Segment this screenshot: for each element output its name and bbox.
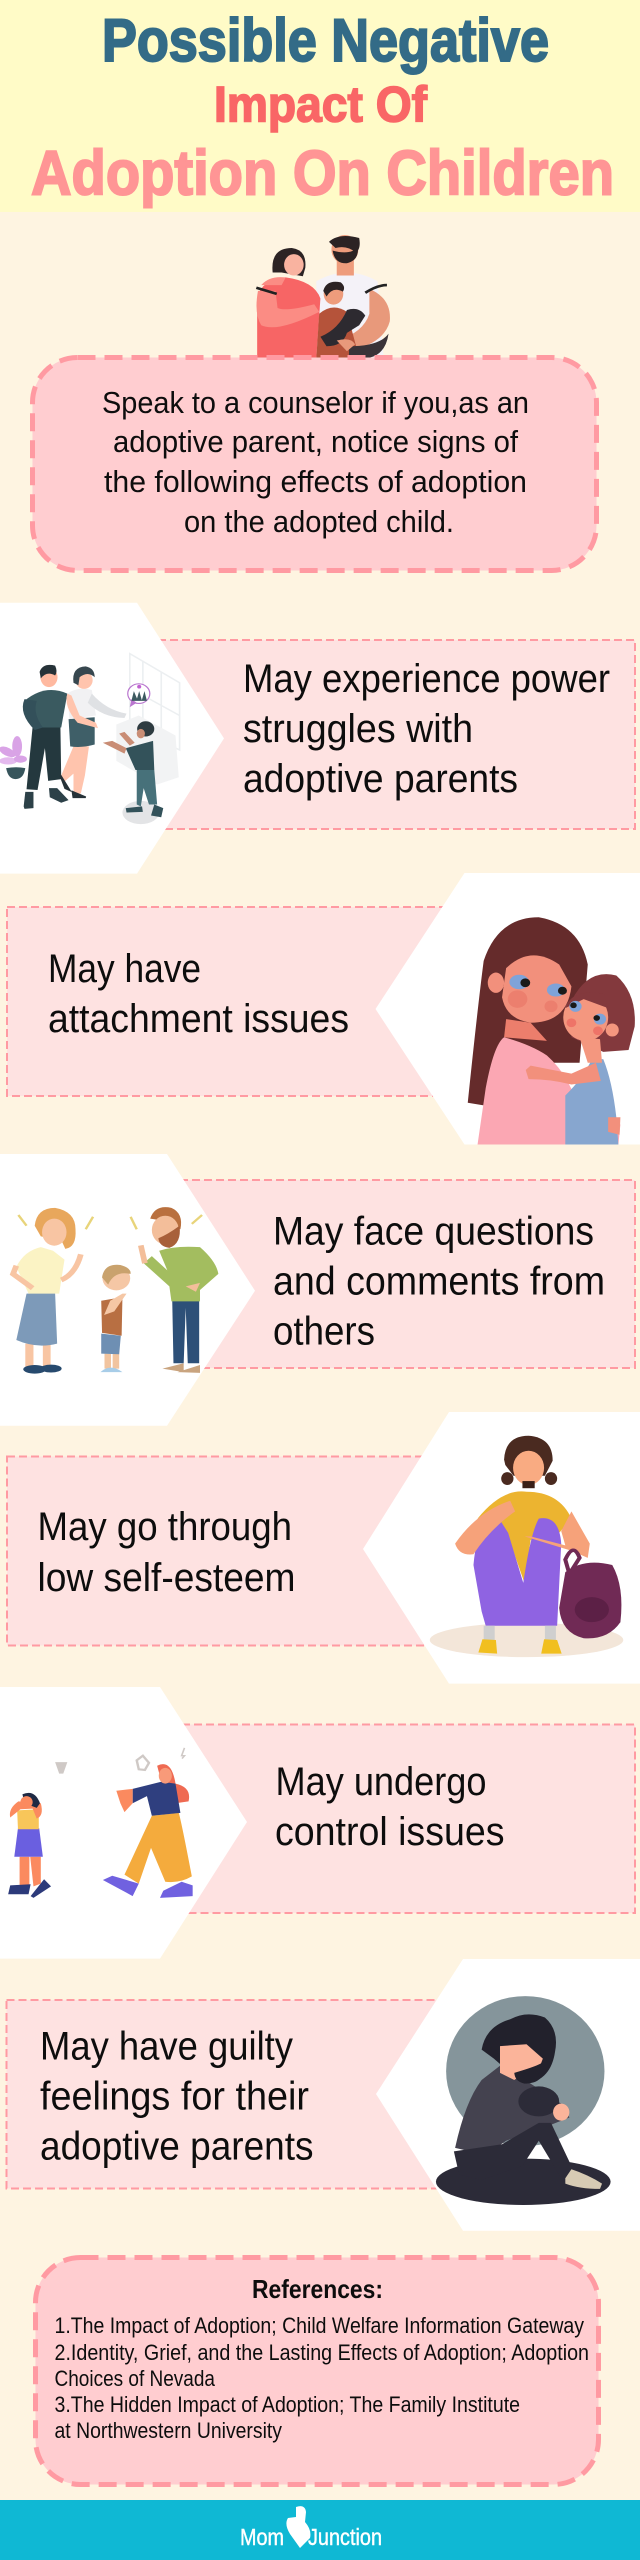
text: questions and comments: May face questions xyxy=(273,1210,594,1254)
text: low self-esteem xyxy=(38,1505,296,1600)
panel: questions and comments xyxy=(0,1154,635,1426)
text: control issues: May undergo xyxy=(276,1760,486,1804)
callout: counselor note: on the adopted child. xyxy=(184,504,454,539)
text: control issues xyxy=(275,1760,504,1854)
panel: control issues xyxy=(0,1687,635,1959)
title line 2: Impact Of xyxy=(214,76,427,132)
text: guilty feelings xyxy=(40,2024,314,2168)
header: title band xyxy=(0,0,640,212)
text: questions and comments xyxy=(273,1210,605,1354)
references list: 3.The Hidden Impact of Adoption; The Family Institute xyxy=(54,2392,520,2417)
references list: 2.Identity, Grief, and the Lasting Effects of Adoption; Adoption xyxy=(54,2340,589,2365)
text: power struggles: struggles with xyxy=(243,707,473,751)
text: low self-esteem: low self-esteem xyxy=(38,1556,296,1600)
callout: counselor note: adoptive parent, notice signs of xyxy=(113,424,518,459)
callout: counselor note: the following effects of adoption xyxy=(104,464,527,499)
panel: references xyxy=(36,2258,598,2484)
panel: power struggles xyxy=(0,603,635,874)
panel: attachment issues xyxy=(7,873,640,1145)
icon: arguing parents and child xyxy=(13,1207,218,1374)
callout: counselor note xyxy=(32,358,596,570)
icon: sad woman hugging knees xyxy=(436,1996,611,2205)
text: attachment issues xyxy=(48,947,349,1041)
references list: at Northwestern University xyxy=(54,2418,282,2443)
references heading: References: xyxy=(252,2274,383,2304)
text: questions and comments: others xyxy=(273,1310,375,1354)
text: power struggles: May experience power xyxy=(243,657,610,701)
icon: family illustration xyxy=(256,235,390,358)
icon: woman walking away from crying girl xyxy=(8,1748,193,1898)
text: guilty feelings: adoptive parents xyxy=(40,2124,314,2168)
text: control issues: control issues xyxy=(275,1810,504,1854)
references list: Choices of Nevada xyxy=(54,2366,216,2391)
icon: mother hugging daughter xyxy=(468,917,635,1145)
text: low self-esteem: May go through xyxy=(38,1505,292,1549)
text: power struggles xyxy=(243,657,610,801)
icon: parents and child xyxy=(0,654,180,824)
title line 1: Possible Negative xyxy=(102,7,549,74)
text: attachment issues: May have xyxy=(48,947,201,991)
callout: counselor note: Speak to a counselor if you,as an xyxy=(102,385,529,420)
text: attachment issues: attachment issues xyxy=(48,997,349,1041)
text: guilty feelings: feelings for their xyxy=(40,2074,309,2118)
references list xyxy=(54,2313,589,2443)
text: power struggles: adoptive parents xyxy=(243,757,518,801)
icon: sad sitting girl with backpack xyxy=(430,1436,623,1657)
panel: low self-esteem xyxy=(7,1412,640,1684)
logo text: Mom xyxy=(240,2524,284,2550)
references list: 1.The Impact of Adoption; Child Welfare Information Gateway xyxy=(54,2313,584,2338)
text: guilty feelings: May have guilty xyxy=(40,2024,293,2068)
logo text xyxy=(240,2524,382,2550)
icon: mother and child logo xyxy=(286,2506,310,2548)
text: questions and comments: and comments from xyxy=(273,1260,605,1304)
footer: MomJunction logo band xyxy=(0,2500,640,2560)
panel: guilty feelings xyxy=(6,1959,640,2231)
logo text: Junction xyxy=(308,2524,382,2550)
